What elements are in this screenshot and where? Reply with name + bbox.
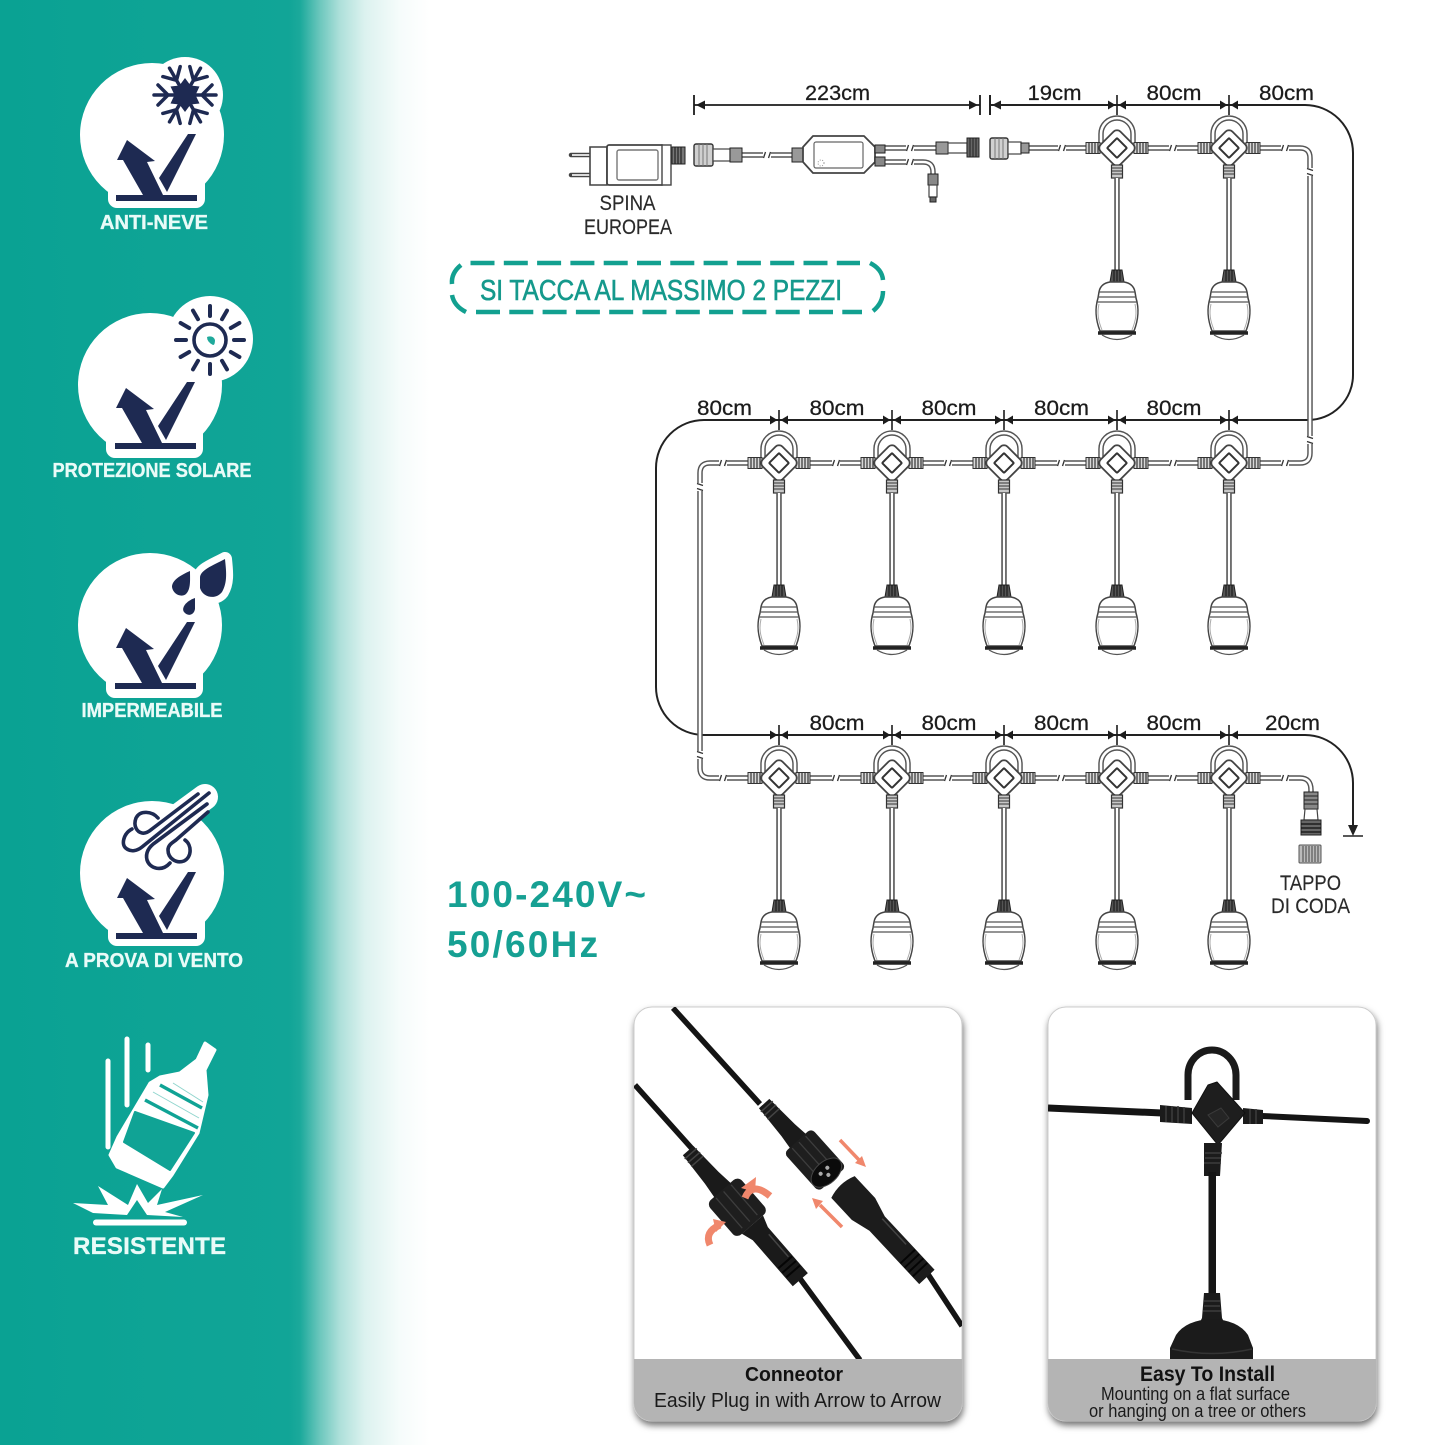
dimension labels row 1: 80cm: [1259, 82, 1314, 105]
dimension labels row 1: 80cm: [1146, 82, 1202, 105]
caption: install: Easy To Install: [1140, 1363, 1275, 1386]
dimension labels row 3: 80cm: [922, 712, 976, 735]
light units row 1: [1086, 118, 1260, 340]
badge: impermeabile: [78, 553, 226, 722]
text: voltage: [447, 874, 646, 965]
caption: connector: Conneotor: [745, 1364, 843, 1386]
icon: tail connector and cap: [1299, 792, 1321, 863]
badge: a prova di vento: [65, 793, 243, 972]
ticks: dimension markers: [770, 95, 1238, 745]
text: spina europea: SPINA: [600, 192, 656, 215]
badge: anti-neve: [80, 57, 224, 234]
badge: resistente: [73, 1039, 226, 1260]
badge: protezione solare: [52, 296, 253, 482]
text: tappo di coda: [1271, 872, 1350, 918]
icon: impact spark: [73, 1184, 203, 1217]
caption: connector: Easily Plug in with Arrow to Arrow: [654, 1390, 942, 1412]
dimension path: measuring line: [656, 95, 1363, 836]
icon: snowflake: [154, 63, 216, 127]
caption: install: [1089, 1363, 1306, 1421]
dimension labels row 1: [1028, 82, 1314, 105]
panel: install photo: [1048, 1007, 1376, 1421]
badge: a prova di vento: A PROVA DI VENTO: [65, 950, 243, 972]
panel: connector photo: [634, 1007, 962, 1421]
icon: water drops: [172, 559, 226, 615]
badge: protezione solare: PROTEZIONE SOLARE: [52, 460, 252, 482]
dimension: 223cm: [694, 82, 980, 115]
dimension labels row 2: 80cm: [922, 397, 976, 420]
text: spina europea: [584, 192, 672, 239]
callout: dashed box: [452, 263, 883, 312]
icon: european plug: [571, 145, 685, 185]
dimension labels row 3: [810, 712, 1320, 735]
dimension labels row 3: 80cm: [1146, 712, 1202, 735]
dimension labels row 1: 19cm: [1028, 82, 1082, 105]
badge: anti-neve: ANTI-NEVE: [100, 212, 208, 234]
badge: resistente: RESISTENTE: [73, 1233, 226, 1260]
controller with connectors: [694, 136, 979, 202]
icon: wind: [123, 793, 209, 868]
dimension labels row 3: 20cm: [1265, 712, 1320, 735]
icon: falling bulb: [110, 1043, 215, 1187]
text: spina europea: EUROPEA: [584, 216, 672, 239]
icon: red arrows: [708, 1140, 866, 1245]
cable run: [695, 143, 1315, 800]
icon: sun: [176, 306, 244, 374]
text: tappo di coda: TAPPO: [1280, 872, 1341, 895]
dimension labels row 2: 80cm: [1034, 397, 1089, 420]
photo: waterproof connectors: [634, 1008, 962, 1421]
caption: install: or hanging on a tree or others: [1089, 1401, 1306, 1421]
dimension: 223cm: 223cm: [805, 82, 870, 105]
text: voltage: 50/60Hz: [447, 924, 598, 965]
dimension labels row 3: 80cm: [810, 712, 864, 735]
dimension labels row 2: [697, 397, 1202, 420]
light units row 3: [748, 748, 1260, 970]
connector: second plug: [990, 138, 1029, 159]
dimension labels row 2: 80cm: [1146, 397, 1202, 420]
dimension labels row 3: 80cm: [1034, 712, 1089, 735]
caption: install: Mounting on a flat surface: [1101, 1384, 1290, 1404]
callout: dashed box: SI TACCA AL MASSIMO 2 PEZZI: [480, 275, 842, 307]
dimension labels row 2: 80cm: [810, 397, 864, 420]
text: tappo di coda: DI CODA: [1271, 895, 1350, 918]
photo: hanging socket: [1048, 1050, 1376, 1421]
caption: connector: [654, 1364, 942, 1412]
light units row 2: [748, 433, 1260, 654]
badge: impermeabile: IMPERMEABILE: [82, 700, 222, 722]
dimension labels row 2: 80cm: [697, 397, 752, 420]
text: voltage: 100-240V~: [447, 874, 646, 915]
